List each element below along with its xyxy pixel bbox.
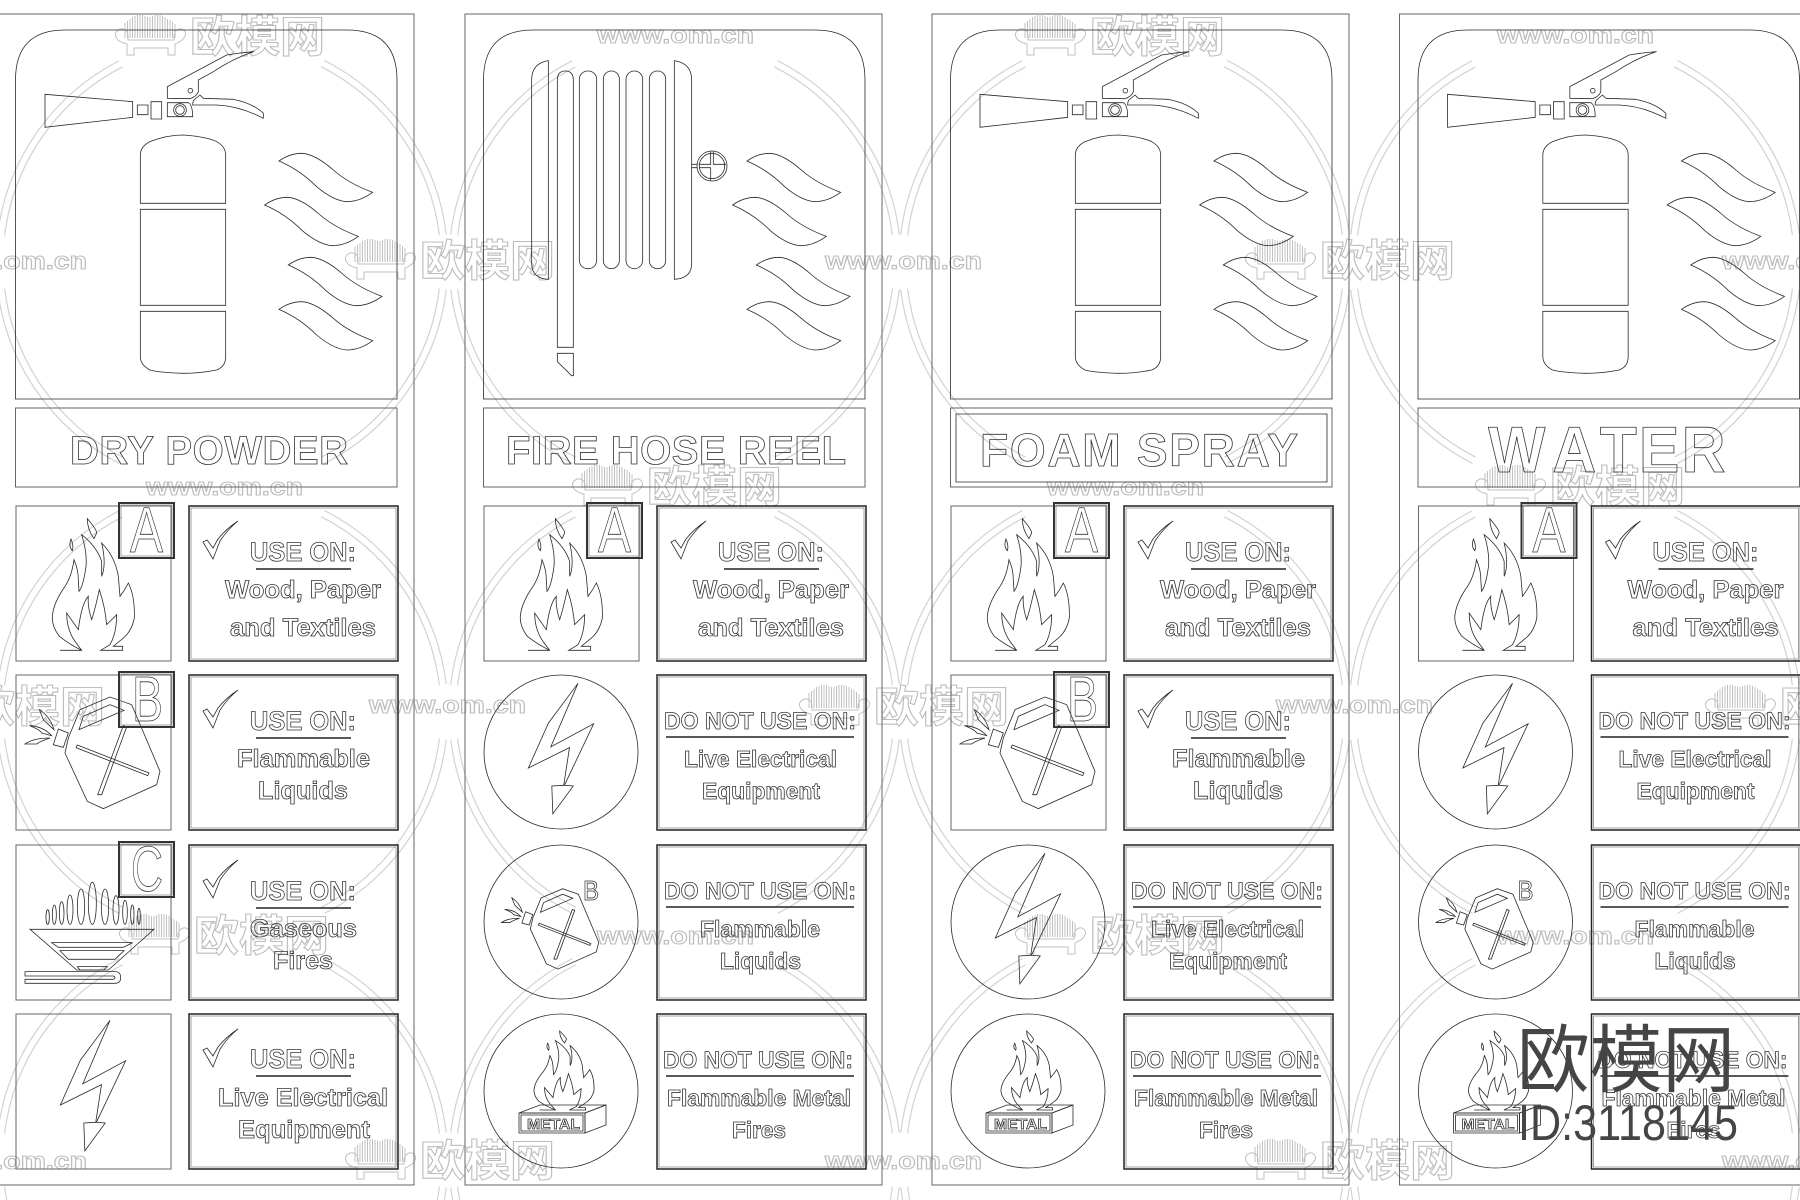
row: electrical do not use: DO NOT USE ON: (1131, 878, 1323, 905)
row: electrical do not use: Equipment (1169, 948, 1287, 974)
watermark layer: www.om.cn (824, 248, 982, 275)
row: electrical use on (16, 1014, 398, 1169)
row: class B use on: Flammable (1172, 745, 1305, 773)
row: electrical do not use: Equipment (702, 778, 820, 804)
row: class C use on: C (131, 833, 163, 905)
dark watermark with ID: 欧模网 (1517, 1019, 1735, 1102)
row: class B use on (951, 663, 1333, 830)
watermark layer: www.om.cn (596, 22, 754, 49)
row: class C use on: USE ON: (250, 876, 356, 906)
watermark layer: 欧模网 (1090, 913, 1225, 961)
row: metal fires do not use (951, 1014, 1333, 1169)
icon: flame waves (1667, 153, 1784, 350)
row: class A use on: A (1532, 494, 1566, 566)
row: class A use on (16, 494, 398, 661)
row: electrical do not use: DO NOT USE ON: (664, 708, 856, 735)
row: class A use on: and Textiles (1165, 614, 1311, 642)
row: electrical do not use (951, 845, 1333, 1000)
row: class A use on: and Textiles (230, 614, 376, 642)
row: class A use on: USE ON: (250, 537, 356, 567)
row: flammable liquids do not use: DO NOT USE ON: (1598, 878, 1790, 905)
row: class A use on: USE ON: (1652, 537, 1758, 567)
row: metal fires do not use: Fires (1199, 1117, 1253, 1143)
row: class A use on (484, 494, 866, 661)
row: metal fires do not use: DO NOT USE ON: (1598, 1047, 1788, 1074)
row: metal fires do not use: METAL (1462, 1116, 1514, 1133)
panel: dry powder (0, 14, 414, 1185)
panel: fire hose reel (465, 14, 882, 1185)
row: class A use on: A (1065, 494, 1098, 566)
row: class A use on: Wood, Paper (693, 576, 849, 604)
row: electrical use on: Live Electrical (218, 1084, 388, 1112)
row: metal fires do not use: METAL (994, 1116, 1047, 1133)
row: flammable liquids do not use: Flammable (1634, 916, 1754, 942)
watermark layer: www.om.cn (1496, 923, 1654, 950)
row: class A use on (1418, 494, 1800, 661)
row: class A use on: USE ON: (1185, 537, 1291, 567)
row: flammable liquids do not use: DO NOT USE ON: (664, 878, 856, 905)
row: flammable liquids do not use: Flammable (700, 916, 820, 942)
watermark layer: www.om.cn (1046, 474, 1204, 501)
row: flammable liquids do not use: Liquids (1654, 948, 1736, 974)
icon: flame waves (265, 153, 382, 350)
row: metal fires do not use: Flammable Metal (1134, 1085, 1318, 1111)
row: flammable liquids do not use: B (1518, 875, 1534, 906)
dark watermark with ID: ID:3118145 (1518, 1095, 1738, 1151)
watermark layer: www.om.cn (145, 474, 303, 501)
row: class B use on: B (1067, 663, 1098, 735)
row: flammable liquids do not use: Liquids (720, 948, 801, 974)
row: electrical do not use (484, 675, 866, 830)
row: class B use on: USE ON: (1185, 706, 1291, 736)
heading: dry powder (16, 408, 397, 487)
row: class B use on: USE ON: (250, 706, 356, 736)
watermark layer: www.om.cn (596, 923, 754, 950)
dark watermark with ID (1517, 1019, 1738, 1151)
row: class A use on (951, 494, 1333, 661)
icon: fire extinguisher (1447, 52, 1666, 373)
watermark layer: 欧模网 (874, 684, 1009, 732)
heading: foam spray: FOAM SPRAY (980, 424, 1298, 476)
watermark layer: 欧模网 (420, 238, 555, 286)
row: electrical do not use: Live Electrical (684, 746, 837, 772)
row: metal fires do not use (484, 1014, 866, 1169)
panel: foam spray (932, 14, 1349, 1185)
watermark layer: www.om.cn (1496, 22, 1654, 49)
row: class A use on: Wood, Paper (1160, 576, 1316, 604)
watermark layer: 欧模网 (647, 464, 782, 512)
row: metal fires do not use: Fires (1666, 1117, 1720, 1143)
row: metal fires do not use: DO NOT USE ON: (1130, 1047, 1320, 1074)
row: flammable liquids do not use (1418, 845, 1800, 1000)
heading: water (1418, 408, 1800, 487)
watermark layer: 欧模网 (1320, 1138, 1455, 1186)
row: class A use on: Wood, Paper (225, 576, 381, 604)
watermark layer: 欧模网 (1090, 14, 1225, 62)
heading: dry powder: DRY POWDER (70, 429, 348, 473)
watermark layer: 欧模网 (1320, 238, 1455, 286)
row: metal fires do not use: Flammable Metal (1602, 1085, 1786, 1111)
heading: fire hose reel: FIRE HOSE REEL (506, 429, 846, 473)
row: class A use on: and Textiles (698, 614, 844, 642)
row: class B use on: Liquids (258, 777, 348, 805)
watermark layer: 欧模网 (1550, 464, 1685, 512)
icon: flame waves (733, 153, 850, 350)
icon: hose reel (532, 61, 727, 376)
row: class B use on: B (132, 663, 163, 735)
row: electrical use on: USE ON: (250, 1044, 356, 1074)
row: electrical do not use (1418, 675, 1800, 830)
row: class A use on: Wood, Paper (1628, 576, 1784, 604)
row: class A use on: A (598, 494, 631, 566)
row: flammable liquids do not use (484, 845, 866, 1000)
row: electrical do not use: Live Electrical (1618, 746, 1772, 772)
row: metal fires do not use: METAL (527, 1116, 580, 1133)
row: flammable liquids do not use: B (583, 875, 599, 906)
row: metal fires do not use: DO NOT USE ON: (663, 1047, 853, 1074)
row: class B use on (16, 663, 398, 830)
watermark layer: www.om.cn (824, 1148, 982, 1175)
row: class A use on: USE ON: (718, 537, 824, 567)
watermark layer: 欧模网 (194, 913, 329, 961)
heading: fire hose reel (484, 408, 865, 487)
watermark layer: www.om.cn (368, 692, 526, 719)
row: class C use on: Gaseous (250, 915, 357, 943)
row: electrical do not use: DO NOT USE ON: (1598, 708, 1790, 735)
icon: fire extinguisher (45, 52, 263, 373)
row: electrical do not use: Equipment (1636, 778, 1755, 804)
watermark layer: www.om.cn (1275, 692, 1433, 719)
row: class A use on: A (130, 494, 163, 566)
row: class C use on (16, 833, 398, 1000)
row: metal fires do not use: Flammable Metal (667, 1085, 851, 1111)
watermark layer: 欧模网 (190, 14, 325, 62)
row: class B use on: Flammable (237, 745, 370, 773)
panel: water (1400, 14, 1800, 1185)
heading: water: WATER (1488, 414, 1725, 486)
row: class B use on: Liquids (1193, 777, 1283, 805)
watermark layer: 欧模网 (420, 1138, 555, 1186)
icon: fire extinguisher (980, 52, 1198, 373)
row: class A use on: and Textiles (1632, 614, 1778, 642)
heading: foam spray (950, 408, 1332, 487)
row: electrical use on: Equipment (238, 1116, 371, 1144)
row: electrical do not use: Live Electrical (1151, 916, 1304, 942)
row: metal fires do not use (1418, 1014, 1800, 1169)
row: class C use on: Fires (273, 947, 333, 975)
icon: flame waves (1200, 153, 1317, 350)
row: metal fires do not use: Fires (732, 1117, 786, 1143)
